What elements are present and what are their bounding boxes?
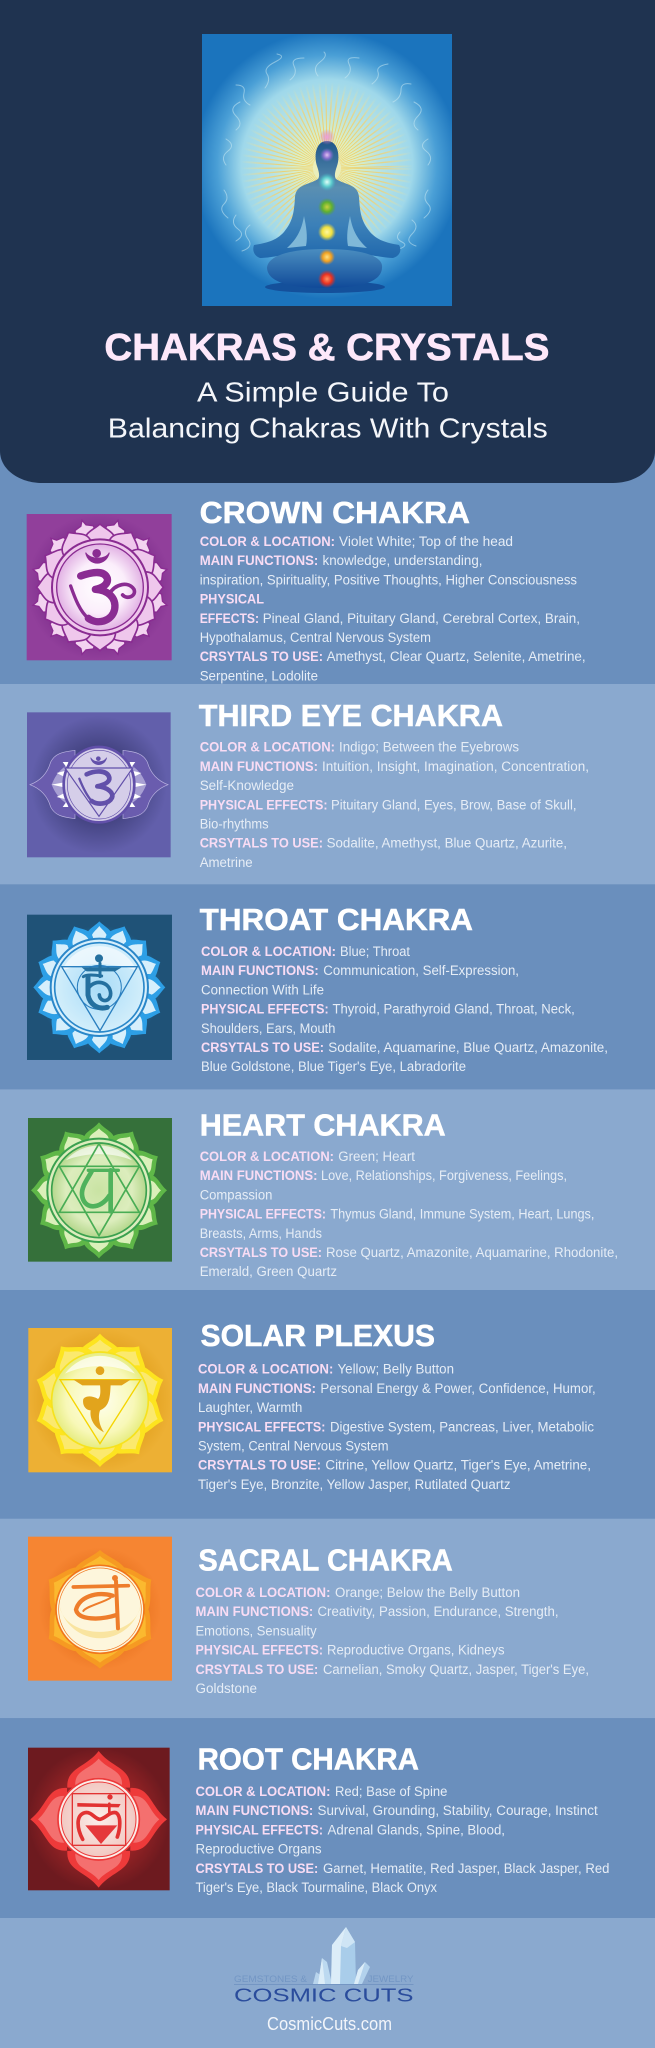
heading: THROAT CHAKRA bbox=[200, 902, 473, 937]
text block: sacral details: COLOR & LOCATION: bbox=[196, 1585, 330, 1600]
heading: HEART CHAKRA bbox=[200, 1107, 446, 1142]
text block: heart details: Thymus Gland, Immune System, Heart, Lungs, bbox=[330, 1207, 594, 1222]
text block: third eye details: MAIN FUNCTIONS: bbox=[200, 759, 318, 774]
text block: sacral details: Emotions, Sensuality bbox=[196, 1623, 317, 1638]
icon: crystal cluster bbox=[313, 1927, 370, 1984]
text block: solar plexus details: Personal Energy & Power, Confidence, Humor, bbox=[320, 1381, 596, 1396]
text block: crown details: EFFECTS: bbox=[200, 611, 259, 626]
text block: throat details: Connection With Life bbox=[201, 982, 324, 997]
text block: sacral details: Creativity, Passion, Endurance, Strength, bbox=[318, 1604, 558, 1619]
text block: third eye details bbox=[200, 740, 589, 870]
text block: crown details: Hypothalamus, Central Nervous System bbox=[200, 630, 431, 645]
text block: third eye details: Sodalite, Amethyst, Blue Quartz, Azurite, bbox=[327, 836, 567, 851]
text block: heart details: CRSYTALS TO USE: bbox=[200, 1245, 322, 1260]
text block: root details: MAIN FUNCTIONS: bbox=[196, 1803, 313, 1818]
hero image: meditating figure with chakras bbox=[202, 34, 452, 306]
text block: sacral details bbox=[196, 1585, 589, 1696]
text block: root details: Survival, Grounding, Stability, Courage, Instinct bbox=[318, 1803, 598, 1818]
text block: root details bbox=[196, 1784, 609, 1895]
panel: heart chakra bbox=[0, 1089, 655, 1290]
text block: throat details: MAIN FUNCTIONS: bbox=[201, 963, 319, 978]
logo: Cosmic Cuts: JEWELRY bbox=[368, 1974, 414, 1984]
text block: crown details: inspiration, Spirituality, Positive Thoughts, Higher Consciousness bbox=[200, 572, 577, 587]
panel: solar plexus bbox=[0, 1290, 655, 1519]
text block: third eye details: COLOR & LOCATION: bbox=[200, 740, 335, 755]
text block: third eye details: Bio-rhythms bbox=[200, 816, 269, 832]
text block: heart details: Green; Heart bbox=[338, 1149, 415, 1164]
text block: crown details: MAIN FUNCTIONS: bbox=[200, 553, 318, 568]
panel: root chakra bbox=[0, 1718, 655, 1918]
text block: crown details: Serpentine, Lodolite bbox=[200, 668, 318, 683]
text block: solar plexus details: System, Central Nervous System bbox=[198, 1438, 388, 1454]
logo: Cosmic Cuts bbox=[234, 1927, 414, 2006]
text block: solar plexus details: Digestive System, Pancreas, Liver, Metabolic bbox=[330, 1419, 594, 1434]
text block: solar plexus details: Citrine, Yellow Quartz, Tiger's Eye, Ametrine, bbox=[325, 1458, 591, 1473]
text block: solar plexus details: PHYSICAL EFFECTS: bbox=[198, 1419, 325, 1434]
subtitle: Balancing Chakras With Crystals bbox=[108, 412, 548, 443]
text block: root details: Garnet, Hematite, Red Jasper, Black Jasper, Red bbox=[323, 1861, 609, 1876]
heading: CROWN CHAKRA bbox=[200, 495, 470, 530]
heading: SOLAR PLEXUS bbox=[200, 1318, 435, 1353]
icon: third eye chakra bbox=[27, 712, 171, 857]
text block: root details: COLOR & LOCATION: bbox=[196, 1784, 330, 1799]
subtitle bbox=[108, 377, 548, 443]
panel: throat chakra bbox=[0, 884, 655, 1089]
text block: heart details: Rose Quartz, Amazonite, Aquamarine, Rhodonite, bbox=[326, 1245, 618, 1260]
text block: solar plexus details: Yellow; Belly Button bbox=[338, 1362, 454, 1377]
text block: throat details bbox=[201, 944, 608, 1074]
website url: CosmicCuts.com bbox=[267, 2013, 392, 2034]
text block: root details: Red; Base of Spine bbox=[335, 1784, 447, 1799]
text block: crown details: COLOR & LOCATION: bbox=[200, 534, 335, 549]
main title: CHAKRAS & CRYSTALS bbox=[104, 327, 549, 369]
icon: crown chakra bbox=[27, 514, 172, 660]
text block: heart details bbox=[200, 1149, 618, 1279]
text block: root details: Reproductive Organs bbox=[196, 1842, 322, 1857]
logo: Cosmic Cuts: COSMIC CUTS bbox=[234, 1985, 414, 2006]
text block: throat details: Blue; Throat bbox=[340, 944, 410, 959]
text block: sacral details: Reproductive Organs, Kidneys bbox=[327, 1643, 505, 1658]
text block: throat details: Sodalite, Aquamarine, Blue Quartz, Amazonite, bbox=[328, 1040, 608, 1055]
text block: third eye details: Pituitary Gland, Eyes, Brow, Base of Skull, bbox=[331, 797, 576, 812]
icon: throat chakra bbox=[27, 915, 172, 1060]
text block: solar plexus details: Tiger's Eye, Bronzite, Yellow Jasper, Rutilated Quartz bbox=[198, 1477, 511, 1492]
icon: root chakra bbox=[28, 1748, 170, 1890]
text block: third eye details: Indigo; Between the Eyebrows bbox=[339, 740, 519, 755]
icon: sacral chakra bbox=[28, 1537, 172, 1681]
panel: sacral chakra bbox=[0, 1519, 655, 1718]
text block: heart details: MAIN FUNCTIONS: bbox=[200, 1168, 318, 1183]
text block: third eye details: PHYSICAL EFFECTS: bbox=[200, 797, 328, 812]
panel: header bbox=[0, 0, 655, 483]
text block: solar plexus details bbox=[198, 1362, 596, 1492]
text block: throat details: Shoulders, Ears, Mouth bbox=[201, 1021, 335, 1036]
text block: third eye details: Intuition, Insight, Imagination, Concentration, bbox=[322, 759, 589, 774]
text block: crown details: CRSYTALS TO USE: bbox=[200, 649, 323, 664]
text block: heart details: Breasts, Arms, Hands bbox=[200, 1226, 322, 1241]
text block: root details: Adrenal Glands, Spine, Blood, bbox=[328, 1822, 505, 1837]
text block: sacral details: Orange; Below the Belly Button bbox=[335, 1585, 520, 1600]
text block: crown details: PHYSICAL bbox=[200, 592, 264, 607]
text block: root details: PHYSICAL EFFECTS: bbox=[196, 1822, 323, 1837]
text block: root details: CRSYTALS TO USE: bbox=[196, 1861, 318, 1876]
text block: solar plexus details: COLOR & LOCATION: bbox=[198, 1362, 333, 1377]
logo: Cosmic Cuts: GEMSTONES & bbox=[234, 1974, 307, 1984]
text block: throat details: Communication, Self-Expression, bbox=[323, 963, 519, 978]
text block: heart details: Compassion bbox=[200, 1187, 272, 1202]
panel: third eye chakra bbox=[0, 684, 655, 884]
panel: footer bbox=[0, 1918, 655, 2048]
text block: crown details: Pineal Gland, Pituitary Gland, Cerebral Cortex, Brain, bbox=[263, 611, 580, 626]
text block: heart details: PHYSICAL EFFECTS: bbox=[200, 1207, 326, 1222]
text block: sacral details: PHYSICAL EFFECTS: bbox=[196, 1643, 323, 1658]
text block: crown details bbox=[200, 534, 586, 683]
heading: ROOT CHAKRA bbox=[198, 1741, 419, 1776]
text block: throat details: CRSYTALS TO USE: bbox=[201, 1040, 324, 1055]
text block: sacral details: Goldstone bbox=[196, 1681, 257, 1696]
heading: SACRAL CHAKRA bbox=[198, 1543, 453, 1578]
text block: third eye details: CRSYTALS TO USE: bbox=[200, 836, 323, 851]
text block: heart details: COLOR & LOCATION: bbox=[200, 1149, 334, 1164]
text block: heart details: Love, Relationships, Forgiveness, Feelings, bbox=[321, 1168, 567, 1183]
text block: solar plexus details: CRSYTALS TO USE: bbox=[198, 1458, 321, 1473]
text block: crown details: Amethyst, Clear Quartz, Selenite, Ametrine, bbox=[327, 649, 586, 664]
text block: crown details: knowledge, understanding, bbox=[322, 553, 482, 568]
text block: throat details: PHYSICAL EFFECTS: bbox=[201, 1002, 329, 1017]
text block: throat details: Blue Goldstone, Blue Tiger's Eye, Labradorite bbox=[201, 1059, 466, 1074]
text block: sacral details: Carnelian, Smoky Quartz, Jasper, Tiger's Eye, bbox=[323, 1662, 589, 1677]
heading: THIRD EYE CHAKRA bbox=[199, 698, 503, 733]
text block: crown details: Violet White; Top of the head bbox=[339, 534, 513, 549]
text block: sacral details: CRSYTALS TO USE: bbox=[196, 1662, 318, 1677]
text block: throat details: COLOR & LOCATION: bbox=[201, 944, 336, 959]
panel: crown chakra bbox=[0, 483, 655, 684]
text block: solar plexus details: MAIN FUNCTIONS: bbox=[198, 1381, 316, 1396]
text block: third eye details: Self-Knowledge bbox=[200, 778, 294, 793]
text block: sacral details: MAIN FUNCTIONS: bbox=[196, 1604, 313, 1619]
subtitle: A Simple Guide To bbox=[197, 377, 449, 408]
text block: root details: Tiger's Eye, Black Tourmaline, Black Onyx bbox=[196, 1880, 437, 1895]
text block: throat details: Thyroid, Parathyroid Gland, Throat, Neck, bbox=[332, 1002, 575, 1017]
text block: third eye details: Ametrine bbox=[200, 855, 253, 870]
icon: solar plexus chakra bbox=[28, 1328, 172, 1472]
icon: heart chakra bbox=[28, 1118, 172, 1262]
text block: solar plexus details: Laughter, Warmth bbox=[198, 1400, 302, 1415]
text block: heart details: Emerald, Green Quartz bbox=[200, 1264, 337, 1279]
